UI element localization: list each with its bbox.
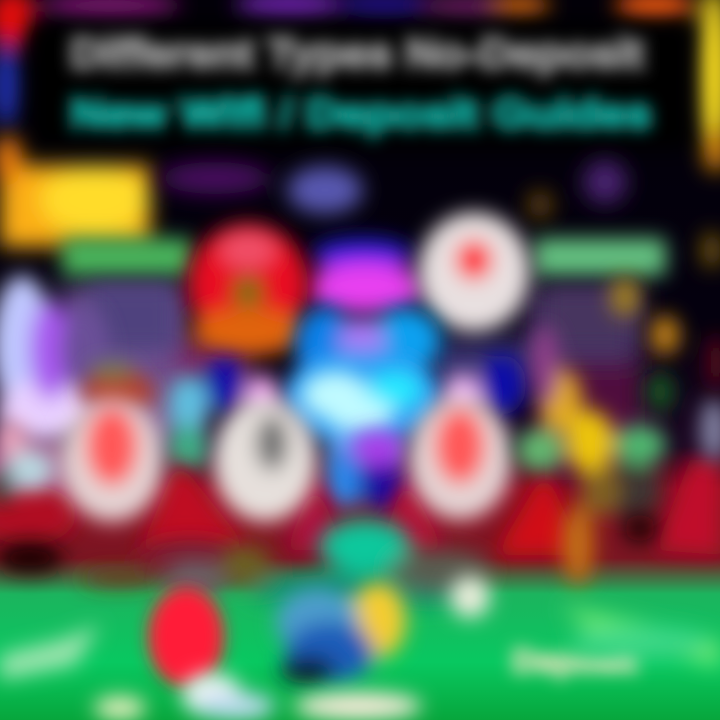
orange base	[192, 308, 304, 356]
gold glow upper left	[0, 135, 150, 247]
dark shadows in red band	[0, 514, 656, 586]
red and white chip right	[408, 396, 512, 520]
highlight	[220, 232, 276, 268]
label on table left	[0, 625, 100, 680]
small sparkles upper area	[160, 160, 720, 268]
subtitle text: New Wifi / Deposit Guides	[70, 89, 652, 138]
light green streak right	[560, 605, 720, 668]
billiard balls: blue and yellow	[276, 582, 406, 684]
red dot	[456, 240, 492, 280]
red and white chip left	[60, 398, 164, 522]
teal chip bottom centre	[165, 519, 490, 606]
green label left	[62, 238, 192, 276]
title text: Different Types No-Deposit	[70, 29, 644, 78]
blue heart centre	[282, 307, 442, 472]
white and grey chip centre	[213, 398, 317, 522]
red chip peak left	[82, 362, 154, 414]
label on table right: Deposit	[512, 643, 637, 679]
olive centre	[234, 276, 262, 308]
purple ring left	[0, 275, 109, 440]
magenta glow centre	[307, 239, 423, 314]
title panel	[30, 22, 692, 150]
decorative top border glow	[0, 0, 720, 172]
red felt peaks	[0, 460, 720, 555]
red disc	[188, 223, 308, 347]
badge: white with red dot, top right	[418, 212, 530, 332]
gold specks right	[610, 277, 720, 390]
left pale blob	[0, 420, 54, 503]
gold and green tokens right	[516, 325, 720, 585]
badge: red with orange base, top left	[188, 223, 308, 356]
purple grey panels	[90, 285, 630, 350]
green label right	[534, 238, 666, 276]
purple haze behind panels	[0, 285, 645, 510]
bottom white chips	[94, 673, 422, 720]
blue and violet accents	[168, 355, 526, 510]
billiard balls: red	[148, 587, 224, 687]
white ball right	[450, 576, 490, 618]
white disc	[418, 212, 530, 332]
